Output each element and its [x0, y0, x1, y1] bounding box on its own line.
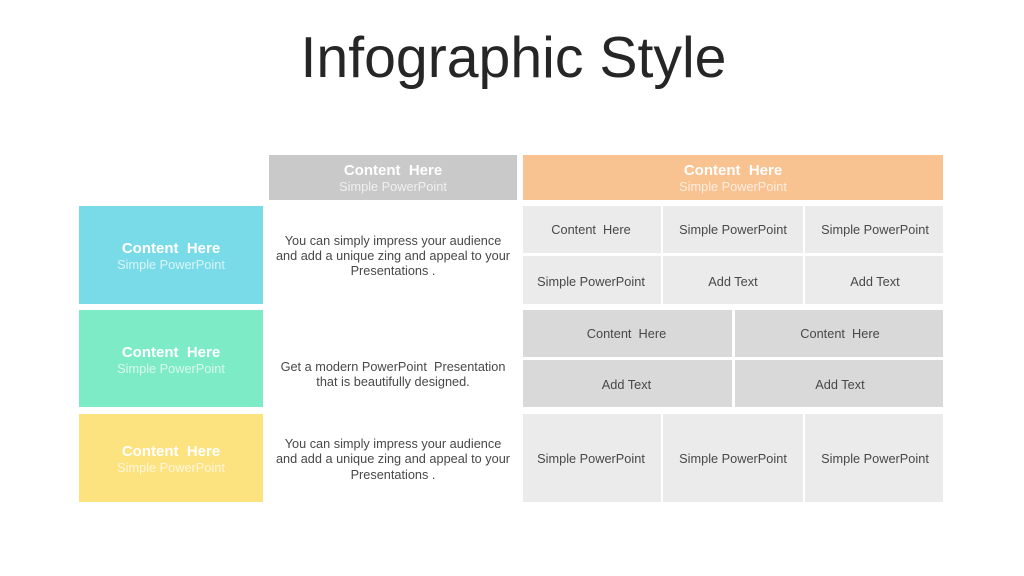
header: orange column: Content Here: [684, 162, 782, 179]
cell: row 2 top left: Content Here: [587, 326, 666, 341]
cell: row 1 bottom right: [805, 256, 943, 304]
description: row 1: You can simply impress your audience: [285, 233, 501, 248]
row label: green: Simple PowerPoint: [117, 360, 225, 376]
row label: blue: [79, 206, 263, 304]
cell: row 2 bottom left: [523, 360, 732, 407]
cell: row 3 left: [523, 414, 661, 502]
row label: blue: Content Here: [122, 240, 220, 256]
cell: row 1 bottom middle: Add Text: [708, 274, 758, 289]
cell: row 2 bottom right: Add Text: [815, 377, 865, 392]
cell: row 1 bottom middle: [663, 256, 803, 304]
header: orange column: Simple PowerPoint: [679, 179, 787, 194]
description: row 3: [276, 436, 510, 482]
description: row 1: [276, 233, 510, 278]
cell: row 1 top middle: Simple PowerPoint: [679, 222, 787, 237]
description: row 3: and add a unique zing and appeal to your: [276, 451, 510, 466]
row label: blue: Simple PowerPoint: [117, 256, 225, 272]
cell: row 2 top left: [523, 310, 732, 357]
description: row 1: Presentations .: [351, 263, 435, 278]
description: row 2: that is beautifully designed.: [316, 374, 470, 389]
cell: row 3 middle: Simple PowerPoint: [679, 451, 787, 466]
cell: row 3 right: [805, 414, 943, 502]
header: grey column: [269, 155, 517, 200]
header: orange column: [523, 155, 943, 200]
cell: row 1 top right: [805, 206, 943, 253]
cell: row 2 bottom left: Add Text: [602, 377, 651, 392]
cell: row 2 top right: Content Here: [800, 326, 880, 341]
cell: row 3 left: Simple PowerPoint: [537, 451, 645, 466]
description: row 3: Presentations .: [351, 467, 435, 482]
cell: row 1 bottom right: Add Text: [850, 274, 900, 289]
cell: row 1 top right: Simple PowerPoint: [821, 222, 929, 237]
row label: yellow: [79, 414, 263, 502]
description: row 2: [281, 359, 505, 389]
cell: row 1 top middle: [663, 206, 803, 253]
cell: row 1 bottom left: Simple PowerPoint: [537, 274, 645, 289]
cell: row 3 right: Simple PowerPoint: [821, 451, 929, 466]
row label: green: Content Here: [122, 344, 220, 360]
title: Infographic Style: [300, 26, 726, 90]
cell: row 2 top right: [735, 310, 943, 357]
cell: row 1 bottom left: [523, 256, 661, 304]
cell: row 1 top left: Content Here: [551, 222, 631, 237]
description: row 2: Get a modern PowerPoint Presentation: [281, 359, 505, 374]
cell: row 3 middle: [663, 414, 803, 502]
row label: yellow: Content Here: [122, 442, 220, 460]
description: row 3: You can simply impress your audience: [285, 436, 501, 451]
description: row 1: and add a unique zing and appeal to your: [276, 248, 510, 263]
row label: yellow: Simple PowerPoint: [117, 460, 225, 474]
row label: green: [79, 310, 263, 407]
header: grey column: Content Here: [344, 162, 442, 179]
cell: row 2 bottom right: [735, 360, 943, 407]
header: grey column: Simple PowerPoint: [339, 179, 447, 194]
cell: row 1 top left: [523, 206, 661, 253]
